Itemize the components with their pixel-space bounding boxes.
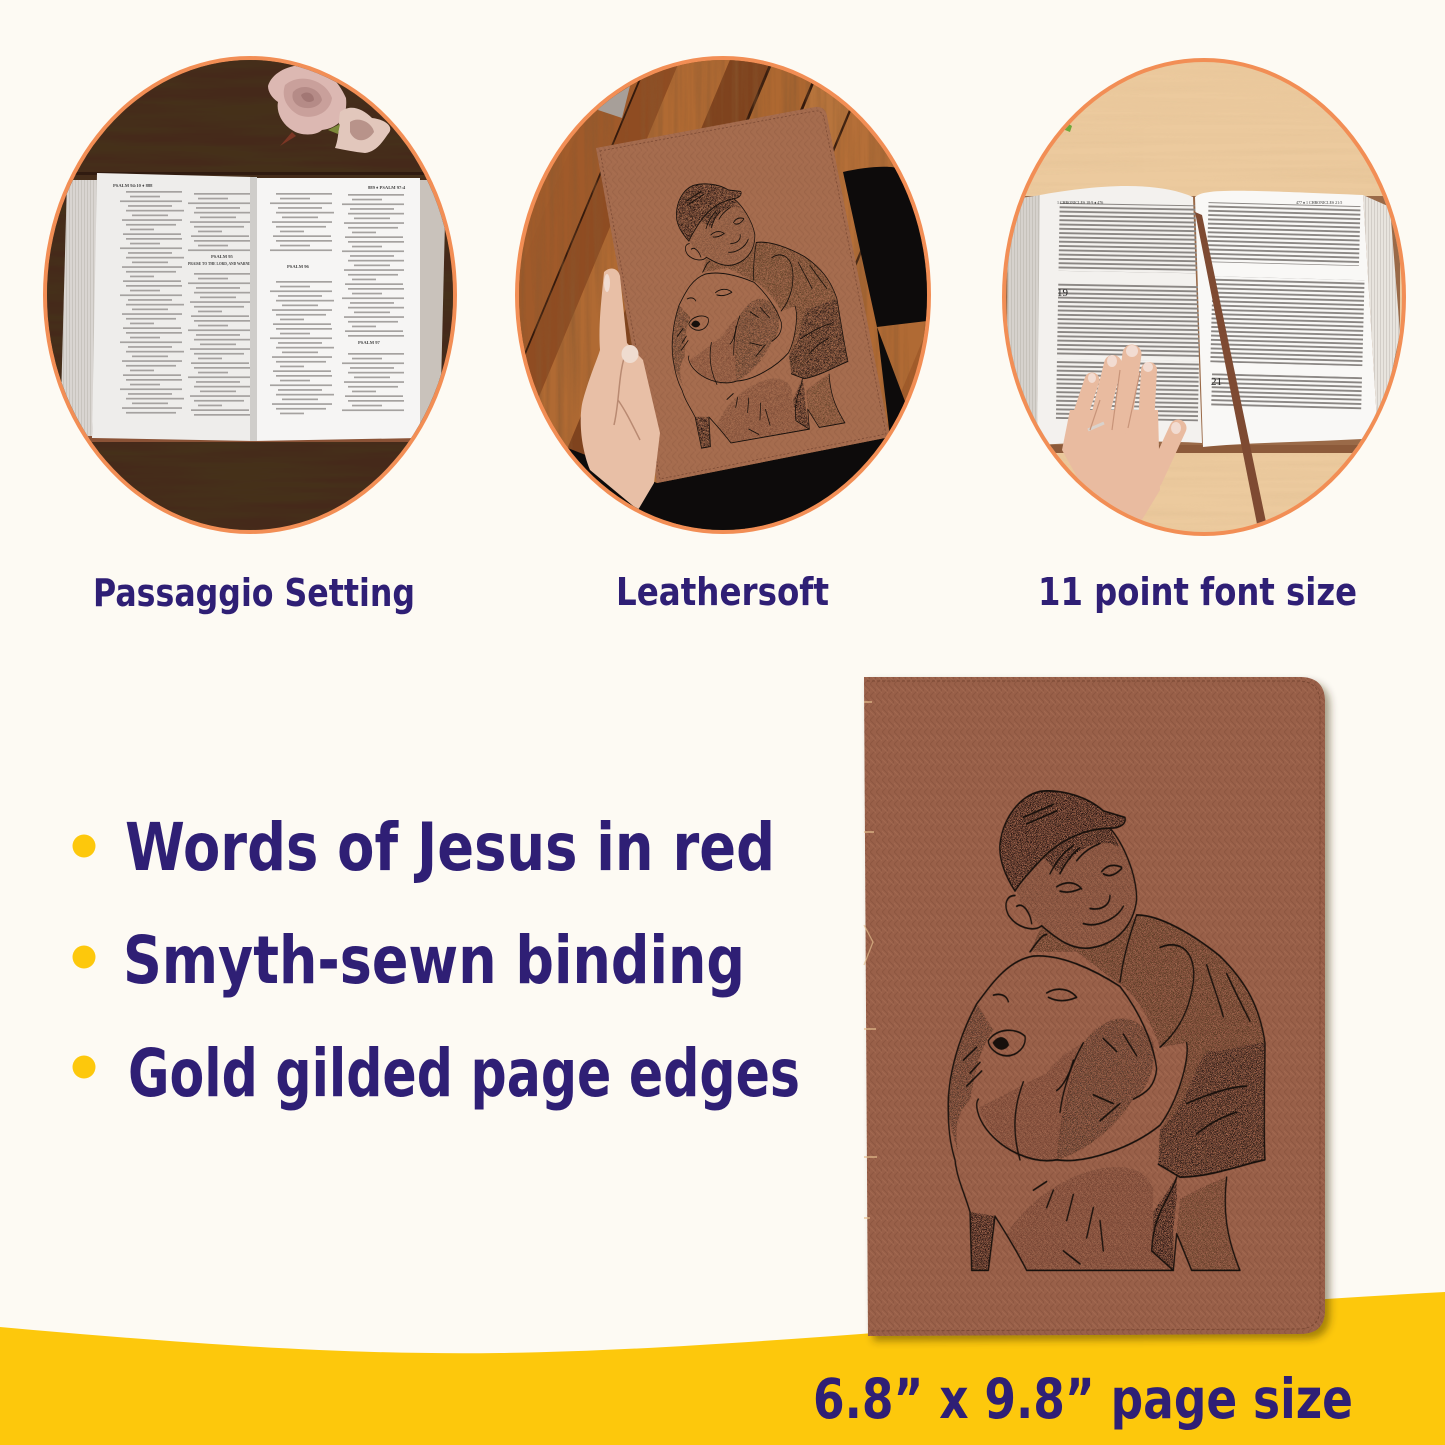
caption: Passaggio Setting: Passaggio Setting bbox=[93, 571, 415, 615]
open book: right page: PSALM 96 bbox=[287, 264, 310, 269]
right page: 477 ♦ 1 CHRONICLES 21:5 bbox=[1296, 200, 1342, 205]
left page: 1 CHRONICLES 18:9 ♦ 476 bbox=[1057, 200, 1103, 205]
bullet 2 bbox=[72, 946, 96, 968]
floor boards bbox=[519, 60, 927, 529]
panel: Passaggio setting photo bbox=[40, 50, 460, 540]
book cover with engraved portrait bbox=[864, 677, 1325, 1336]
book cover and page blocks bbox=[995, 195, 1400, 453]
bullet 3 bbox=[72, 1056, 96, 1078]
feature: Gold gilded page edges: Gold gilded page edges bbox=[128, 1035, 800, 1112]
small portrait engraving bbox=[672, 183, 848, 449]
feature list bbox=[72, 809, 800, 1112]
open book: left page: PRAISE TO THE LORD, AND WARNING bbox=[188, 262, 255, 266]
open book: right page: 889 ♦ PSALM 97:4 bbox=[368, 185, 406, 190]
open book: left page bbox=[92, 173, 255, 441]
open book: right page: PSALM 97 bbox=[358, 340, 381, 345]
hand holding the book bbox=[581, 269, 660, 510]
open book: left page: PSALM 95 bbox=[211, 254, 234, 259]
hand on page bbox=[1062, 345, 1181, 528]
open book: right page bbox=[250, 177, 420, 441]
grey box corner bbox=[598, 86, 630, 118]
panel: Leathersoft photo bbox=[515, 56, 931, 534]
black clothing bbox=[555, 167, 935, 540]
caption: 11 point font size: 11 point font size bbox=[1038, 570, 1357, 614]
open book: left page: PSALM 94:10 ♦ 888 bbox=[113, 183, 153, 188]
bullet 1 bbox=[72, 834, 96, 858]
gilt spine marks bbox=[864, 702, 877, 1218]
left page bbox=[1037, 186, 1202, 445]
yellow wave band bbox=[0, 1292, 1445, 1445]
feature: Words of Jesus in red: Words of Jesus in red bbox=[125, 809, 775, 886]
feature: Smyth-sewn binding: Smyth-sewn binding bbox=[123, 922, 745, 999]
portrait engraving: boy and dog bbox=[948, 791, 1265, 1270]
roses bbox=[268, 65, 390, 153]
left page: 19 bbox=[1057, 287, 1068, 299]
caption: Leathersoft: Leathersoft bbox=[616, 570, 829, 614]
right page bbox=[1195, 191, 1378, 447]
open book: page edges bbox=[60, 172, 446, 442]
small leather cover bbox=[596, 107, 890, 483]
green leaf bbox=[1065, 124, 1072, 132]
ribbon marker bbox=[1195, 212, 1266, 524]
panel: 11 point font size photo bbox=[990, 50, 1420, 540]
right page: 21 bbox=[1211, 376, 1222, 388]
